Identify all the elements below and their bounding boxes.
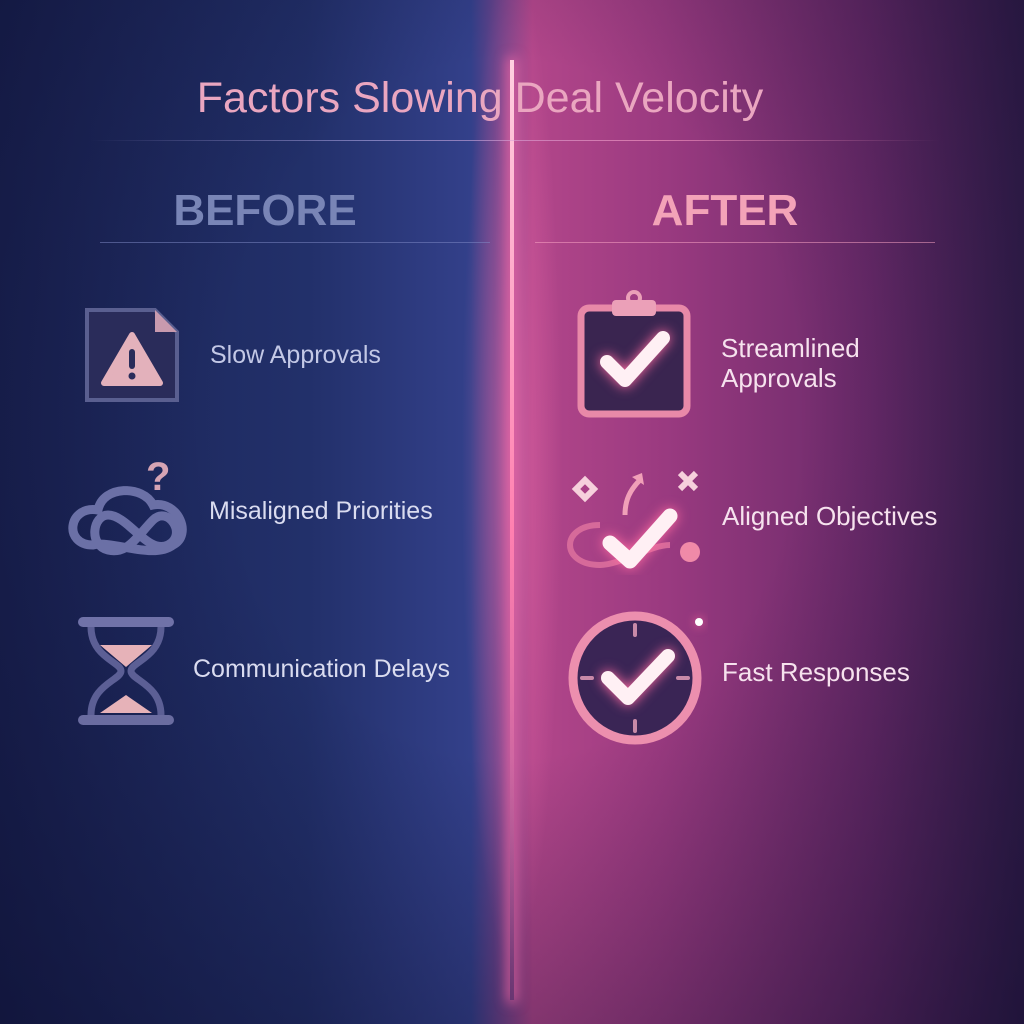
title: Factors Slowing Deal Velocity: [197, 74, 763, 122]
icon: warning doc: [85, 308, 179, 402]
heading: before: BEFORE: [173, 186, 357, 235]
icon: knot: [68, 455, 187, 556]
item: misaligned: [68, 455, 433, 556]
icon: aligned check: [567, 470, 700, 574]
icon: clipboard check: [578, 290, 690, 418]
label: Streamlined: [721, 333, 860, 363]
item: streamlined: [578, 290, 860, 418]
item: fast responses: [568, 612, 910, 744]
label: Misaligned Priorities: [209, 497, 433, 525]
label: Approvals: [721, 363, 837, 393]
label: Communication Delays: [193, 655, 450, 683]
item: aligned: [567, 470, 937, 574]
heading: after: AFTER: [652, 186, 798, 235]
icon: knot: ?: [146, 455, 170, 499]
glow line: [462, 0, 562, 1024]
label: [721, 333, 860, 393]
icon: hourglass: [78, 617, 174, 725]
icon: clock check: [568, 612, 708, 744]
label: Aligned Objectives: [722, 501, 937, 531]
label: Slow Approvals: [210, 341, 381, 369]
label: Fast Responses: [722, 657, 910, 687]
item: communication: [78, 617, 450, 725]
item: slow approvals: [85, 308, 381, 402]
